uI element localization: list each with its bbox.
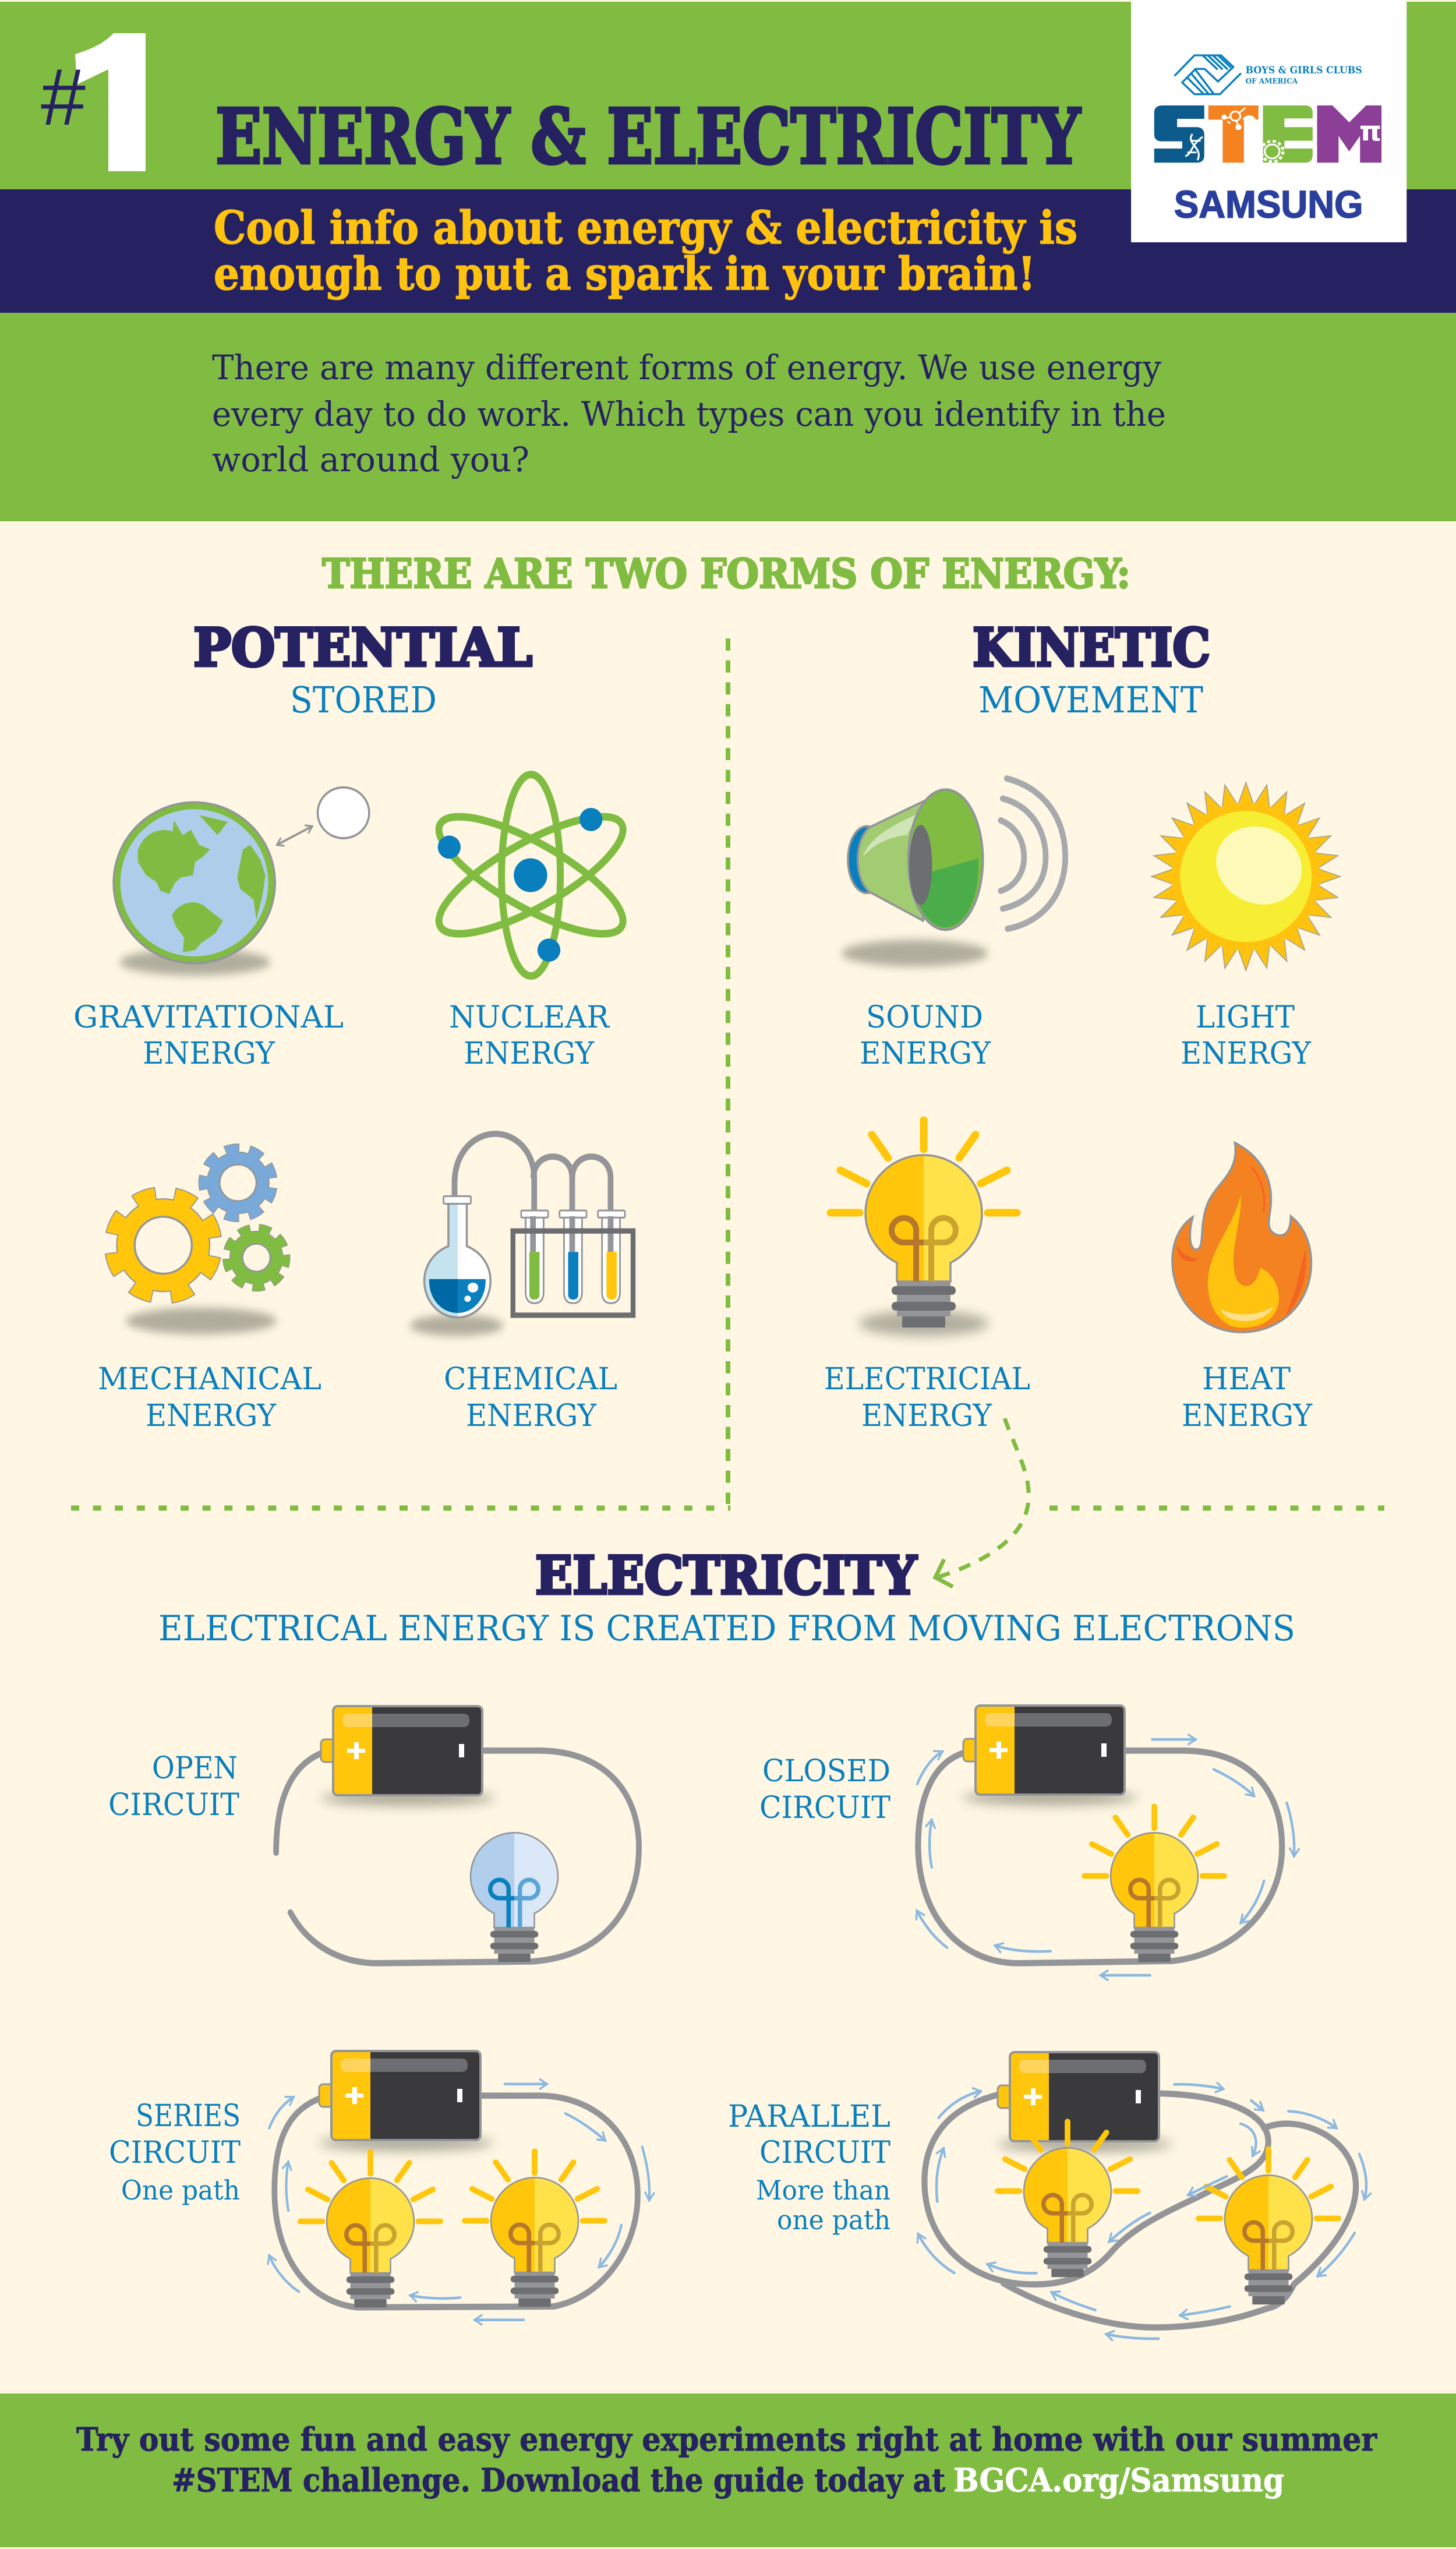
intro text: There are many different forms of energy. We use energy bbox=[212, 348, 1161, 387]
label: parallel circuit: one path bbox=[777, 2204, 890, 2236]
intro text: every day to do work. Which types can you identify in the bbox=[212, 394, 1166, 434]
label: parallel circuit: More than bbox=[756, 2174, 890, 2206]
label: closed circuit: CIRCUIT bbox=[759, 1791, 890, 1826]
label: sound energy: ENERGY bbox=[860, 1036, 991, 1071]
subheading: stored: STORED bbox=[290, 679, 437, 721]
label: gravitational energy bbox=[73, 1000, 344, 1071]
label: closed circuit: CLOSED bbox=[762, 1754, 890, 1789]
label: nuclear energy bbox=[449, 1000, 610, 1071]
label: series circuit bbox=[109, 2099, 241, 2206]
label: mechanical energy: ENERGY bbox=[146, 1399, 277, 1434]
logo: Boys & Girls Clubs hands bbox=[1175, 55, 1241, 94]
logo: T bbox=[1208, 105, 1259, 163]
diagram: series circuit bbox=[269, 2051, 649, 2320]
label: electrical energy bbox=[824, 1362, 1030, 1434]
logo: Boys & Girls Clubs name bbox=[1246, 65, 1362, 86]
label: heat energy: ENERGY bbox=[1182, 1399, 1313, 1434]
logo: S bbox=[1154, 105, 1204, 163]
subheading: electrical energy definition: ELECTRICAL ENERGY IS CREATED FROM MOVING ELECTRONS bbox=[158, 1608, 1295, 1649]
footer text: Try out some fun and easy energy experiments right at home with our summer bbox=[76, 2420, 1377, 2458]
hash mark: # bbox=[41, 52, 86, 142]
label: nuclear energy: NUCLEAR bbox=[449, 1000, 610, 1035]
footer text bbox=[76, 2420, 1377, 2499]
label: parallel circuit bbox=[728, 2099, 890, 2236]
header panel: navy band bbox=[0, 189, 1456, 313]
label: nuclear energy: ENERGY bbox=[464, 1036, 595, 1071]
footer panel bbox=[0, 2393, 1456, 2547]
diagram: open circuit bbox=[276, 1706, 639, 1963]
label: series circuit: CIRCUIT bbox=[109, 2135, 241, 2170]
label: chemical energy bbox=[444, 1362, 617, 1434]
logo: M bbox=[1317, 105, 1381, 163]
icon: chemistry flask and test tubes bbox=[409, 1134, 633, 1336]
header panel: green top band bbox=[0, 2, 1456, 189]
heading: electricity: ELECTRICITY bbox=[535, 1545, 918, 1607]
logo: M: π bbox=[1359, 116, 1381, 147]
label: heat energy bbox=[1182, 1362, 1313, 1434]
icon: speaker bbox=[842, 778, 1065, 966]
label: chemical energy: ENERGY bbox=[466, 1399, 597, 1434]
label: series circuit: One path bbox=[121, 2174, 240, 2206]
logo panel bbox=[1131, 0, 1406, 242]
header panel: green intro band bbox=[0, 313, 1456, 521]
intro text bbox=[212, 348, 1166, 479]
subheading: movement: MOVEMENT bbox=[978, 679, 1203, 721]
icon: light bulb bbox=[831, 1120, 1017, 1336]
icon: earth and moon bbox=[112, 788, 369, 976]
logo: Samsung: SAMSUNG bbox=[1174, 183, 1363, 226]
label: open circuit: OPEN bbox=[152, 1751, 238, 1786]
label: series circuit: SERIES bbox=[136, 2099, 241, 2134]
label: open circuit bbox=[108, 1751, 239, 1823]
label: electrical energy: ELECTRICIAL bbox=[824, 1362, 1030, 1397]
label: gravitational energy: GRAVITATIONAL bbox=[73, 1000, 344, 1035]
label: mechanical energy bbox=[98, 1362, 321, 1434]
label: open circuit: CIRCUIT bbox=[108, 1788, 239, 1823]
label: light energy bbox=[1181, 1000, 1312, 1071]
label: parallel circuit: PARALLEL bbox=[728, 2099, 890, 2134]
logo: Boys & Girls Clubs name: OF AMERICA bbox=[1246, 77, 1298, 86]
logo: Boys & Girls Clubs name: BOYS & GIRLS CLUBS bbox=[1246, 65, 1362, 76]
label: closed circuit bbox=[759, 1754, 890, 1826]
diagram: closed circuit bbox=[917, 1706, 1294, 1975]
heading: potential: POTENTIAL bbox=[193, 617, 532, 679]
label: sound energy bbox=[860, 1000, 991, 1071]
label: electrical energy: ENERGY bbox=[861, 1399, 992, 1434]
label: parallel circuit: CIRCUIT bbox=[759, 2135, 890, 2170]
subtitle bbox=[214, 202, 1077, 301]
label: sound energy: SOUND bbox=[866, 1000, 983, 1035]
label: chemical energy: CHEMICAL bbox=[444, 1362, 617, 1397]
title: ENERGY & ELECTRICITY bbox=[215, 92, 1082, 181]
intro text: world around you? bbox=[212, 440, 529, 479]
label: light energy: LIGHT bbox=[1196, 1000, 1295, 1035]
subtitle: enough to put a spark in your brain! bbox=[214, 248, 1036, 301]
arrow: electrical energy to electricity bbox=[935, 1418, 1029, 1587]
heading: kinetic: KINETIC bbox=[973, 617, 1210, 679]
diagram: parallel circuit bbox=[918, 2052, 1366, 2339]
icon: atom bbox=[426, 775, 635, 976]
footer text: BGCA.org/Samsung bbox=[953, 2461, 1284, 2499]
subtitle: Cool info about energy & electricity is bbox=[214, 202, 1077, 255]
icon: flame bbox=[1172, 1143, 1311, 1332]
icon: sun bbox=[1147, 778, 1345, 976]
logo: E bbox=[1261, 105, 1313, 163]
label: gravitational energy: ENERGY bbox=[143, 1036, 275, 1071]
label: mechanical energy: MECHANICAL bbox=[98, 1362, 321, 1397]
label: light energy: ENERGY bbox=[1181, 1036, 1312, 1071]
section heading: two forms: THERE ARE TWO FORMS OF ENERGY: bbox=[322, 550, 1130, 598]
icon: gears bbox=[104, 1145, 288, 1334]
footer text: #STEM challenge. Download the guide today at bbox=[172, 2461, 946, 2499]
label: heat energy: HEAT bbox=[1202, 1362, 1291, 1397]
